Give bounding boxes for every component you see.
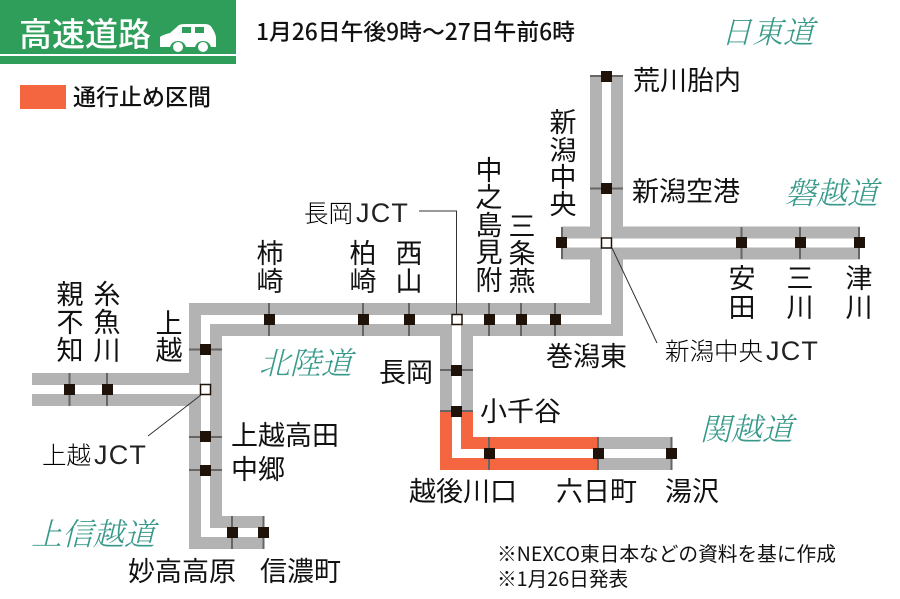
junction labels: 新潟中央JCT xyxy=(665,333,819,368)
road names: 磐越道 xyxy=(785,168,882,213)
interchange labels: 不 xyxy=(56,301,84,340)
interchange labels: 魚 xyxy=(94,301,120,340)
interchange labels: 潟 xyxy=(550,129,576,168)
interchange labels: 越 xyxy=(156,329,182,368)
interchange labels: 見 xyxy=(476,231,502,270)
interchange labels: 中 xyxy=(550,156,576,195)
junction labels: 上越JCT xyxy=(42,437,147,472)
interchange labels: 新 xyxy=(550,101,576,140)
interchange labels: 柿 xyxy=(256,232,284,271)
source note: ※1月26日発表 xyxy=(497,563,629,592)
interchange labels: 糸 xyxy=(94,273,120,312)
interchange labels: 新潟空港 xyxy=(632,170,740,209)
interchange labels: 小千谷 xyxy=(480,390,561,429)
header banner xyxy=(0,0,236,64)
interchange labels: 川 xyxy=(786,286,814,325)
interchange labels: 山 xyxy=(396,260,422,299)
interchange labels: 三 xyxy=(786,257,814,296)
interchange labels: 崎 xyxy=(350,260,376,299)
interchange labels: 中 xyxy=(476,149,502,188)
road: Joshinetsu, Hokuriku and Nichito grey bands xyxy=(32,76,860,532)
date and time text: 1月26日午後9時～27日午前6時 xyxy=(256,14,575,47)
junction labels: 長岡JCT xyxy=(304,195,409,230)
icon: car xyxy=(160,24,216,52)
legend: closed section: 通行止め区間 xyxy=(73,78,211,112)
interchange labels: 親 xyxy=(56,273,84,312)
interchange labels: 安 xyxy=(728,257,756,296)
interchange labels: 柏 xyxy=(350,232,376,271)
heading: 高速道路 xyxy=(19,8,151,56)
road network xyxy=(32,71,865,549)
interchange labels: 中郷 xyxy=(231,448,285,487)
interchange labels: 燕 xyxy=(508,260,536,299)
interchange labels: 崎 xyxy=(256,260,284,299)
interchange labels: 長岡 xyxy=(379,351,433,390)
interchange labels: 西 xyxy=(396,232,422,271)
interchange labels: 知 xyxy=(56,329,84,368)
interchange labels: 妙高高原 xyxy=(128,550,236,589)
road names: 日東道 xyxy=(721,7,818,52)
junction leader lines xyxy=(148,211,657,436)
interchange labels: 央 xyxy=(550,183,576,222)
interchange markers xyxy=(64,71,865,538)
road names: 上信越道 xyxy=(31,509,159,554)
interchange labels: 越後川口 xyxy=(409,470,517,509)
source note xyxy=(497,538,836,592)
interchange labels: 田 xyxy=(728,286,756,325)
road names: 北陸道 xyxy=(259,338,356,383)
road names: 関越道 xyxy=(700,404,797,449)
interchange labels: 三 xyxy=(508,205,536,244)
interchange labels: 条 xyxy=(508,232,536,271)
interchange labels: 上 xyxy=(156,302,182,341)
interchange labels: 島 xyxy=(476,204,502,243)
interchange ticks xyxy=(70,76,859,549)
interchange labels: 荒川胎内 xyxy=(633,59,741,98)
interchange labels: 六日町 xyxy=(556,470,637,509)
interchange labels: 之 xyxy=(476,176,502,215)
interchange labels: 附 xyxy=(476,259,502,298)
interchange labels: 上越高田 xyxy=(231,414,339,453)
interchange labels: 巻潟東 xyxy=(546,335,627,374)
junction markers xyxy=(200,238,612,394)
interchange labels: 信濃町 xyxy=(260,550,341,589)
interchange labels: 津 xyxy=(846,257,872,296)
interchange labels: 湯沢 xyxy=(665,470,719,509)
junction labels xyxy=(42,195,819,472)
interchange labels: 川 xyxy=(846,286,872,325)
source note: ※NEXCO東日本などの資料を基に作成 xyxy=(497,538,836,567)
interchange labels: 川 xyxy=(94,329,120,368)
